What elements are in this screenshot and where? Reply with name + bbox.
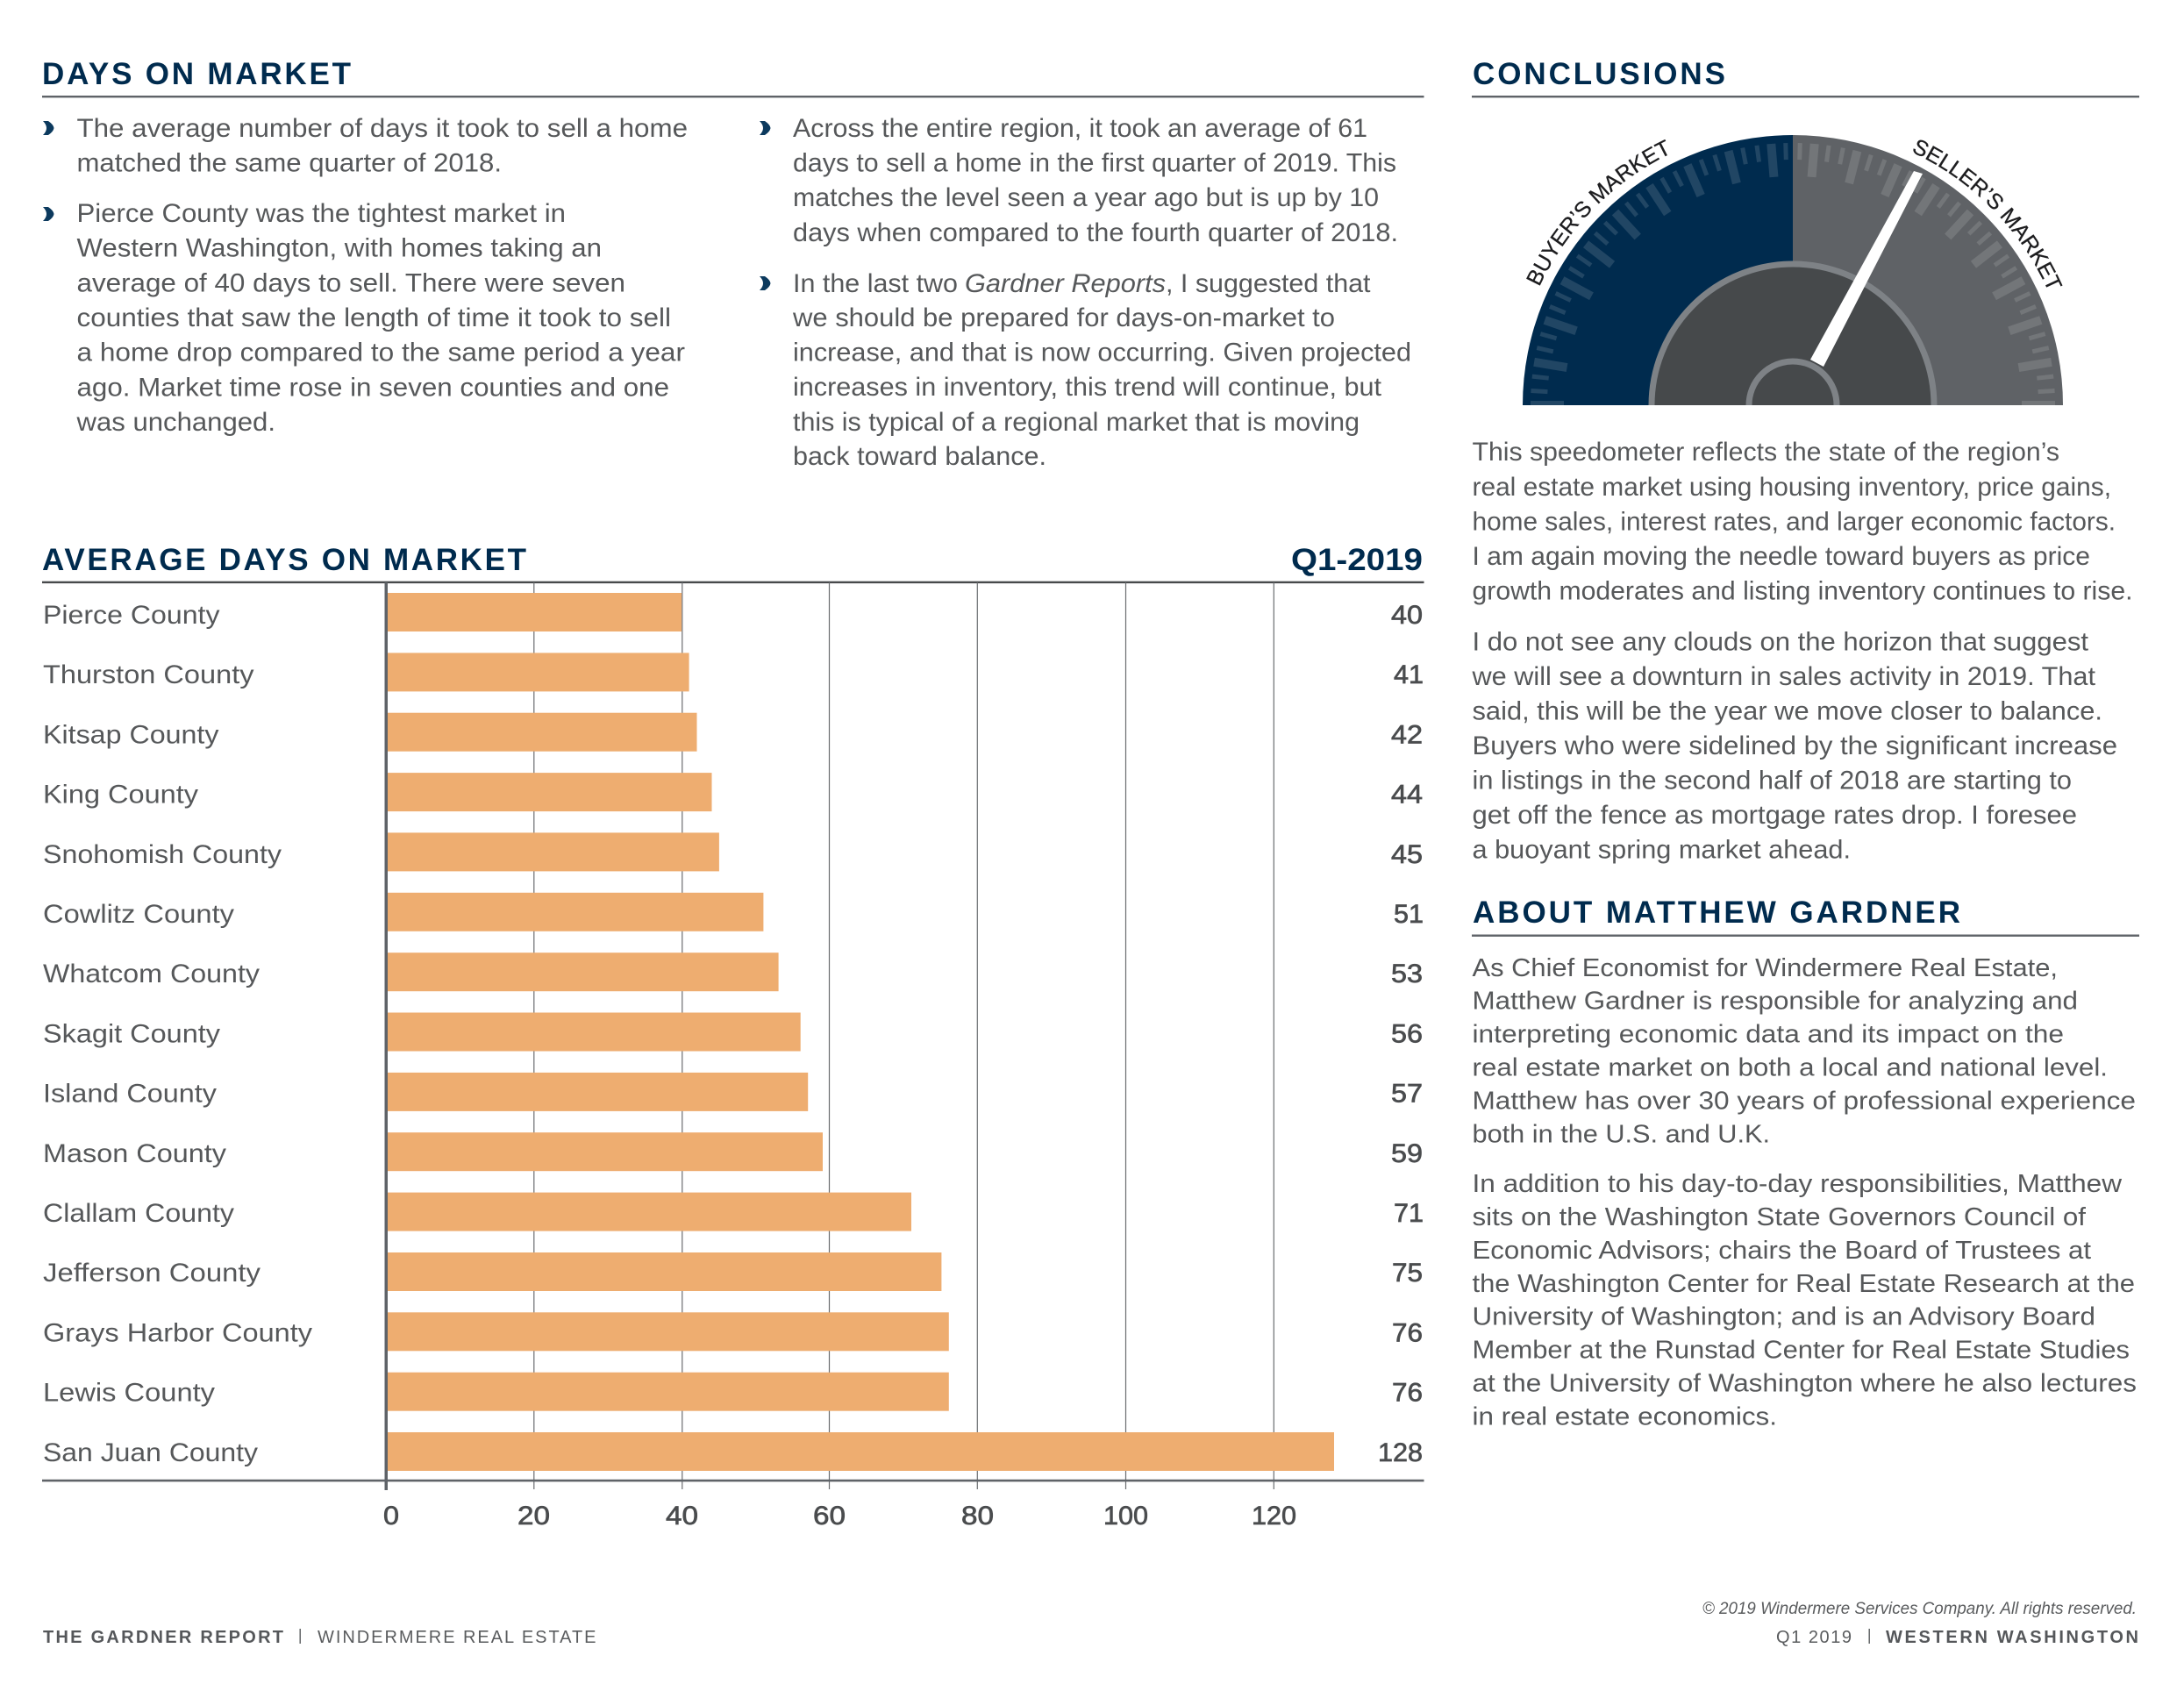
text block: days on market left column: matched the same quarter of 2018.	[77, 149, 502, 177]
county labels: Kitsap County	[43, 720, 219, 749]
text block: conclusions: said, this will be the year we move closer to balance.	[1472, 697, 2102, 726]
county labels: Skagit County	[43, 1019, 220, 1048]
county labels: Mason County	[43, 1139, 226, 1168]
icon: bullet chevron 2	[43, 207, 54, 221]
axis lines	[42, 582, 1424, 1490]
text block: about matthew gardner: Member at the Runstad Center for Real Estate Studies	[1472, 1337, 2130, 1365]
heading: average days on market	[42, 543, 1424, 583]
value labels: 53	[1391, 960, 1423, 988]
text block: days on market left column: ago. Market time rose in seven counties and one	[77, 373, 669, 402]
heading: conclusions: CONCLUSIONS	[1473, 57, 1725, 91]
x axis labels: 120	[1252, 1502, 1296, 1530]
county labels: Whatcom County	[43, 960, 260, 988]
county labels: Lewis County	[43, 1379, 215, 1408]
x axis labels: 20	[517, 1502, 550, 1530]
gauge: buyer half	[1523, 135, 1793, 405]
x axis labels: 80	[961, 1502, 994, 1530]
value labels: 57	[1391, 1080, 1423, 1109]
footer right: WESTERN WASHINGTON	[1886, 1628, 2138, 1647]
text block: conclusions: get off the fence as mortgage rates drop. I foresee	[1472, 801, 2077, 830]
value labels: 76	[1392, 1379, 1423, 1408]
county labels: Clallam County	[43, 1199, 234, 1228]
gauge: seller half	[1793, 135, 2063, 405]
text block: conclusions: growth moderates and listing inventory continues to rise.	[1472, 577, 2133, 605]
value labels: 56	[1391, 1019, 1423, 1048]
county labels: Thurston County	[43, 660, 254, 689]
footer left: THE GARDNER REPORT	[43, 1628, 283, 1647]
footer right: Q1 2019	[1776, 1628, 1852, 1647]
text block: about matthew gardner: sits on the Washington State Governors Council of	[1472, 1203, 2087, 1231]
text block: about matthew gardner: In addition to his day-to-day responsibilities, Matthew	[1472, 1170, 2123, 1198]
text block: about matthew gardner: University of Washington; and is an Advisory Board	[1472, 1303, 2095, 1331]
footer right	[1702, 1600, 2138, 1647]
icon: bullet chevron 1	[43, 121, 54, 135]
heading: average days on market: Q1-2019	[1291, 543, 1423, 577]
text block: about matthew gardner: Matthew Gardner is responsible for analyzing and	[1472, 988, 2078, 1016]
text block: about matthew gardner: the Washington Center for Real Estate Research at the	[1472, 1270, 2135, 1298]
text block: conclusions: This speedometer reflects the state of the region’s	[1472, 438, 2059, 467]
county labels: Jefferson County	[43, 1259, 261, 1288]
text block: conclusions: I do not see any clouds on the horizon that suggest	[1472, 628, 2089, 657]
text block: days on market left column	[43, 114, 688, 437]
text block: about matthew gardner: Economic Advisors; chairs the Board of Trustees at	[1472, 1237, 2091, 1265]
text block: conclusions: home sales, interest rates, and larger economic factors.	[1472, 507, 2116, 537]
x axis labels: 100	[1103, 1502, 1148, 1530]
county labels: King County	[43, 781, 198, 810]
icon: bullet chevron 4	[760, 276, 770, 290]
value labels: 45	[1391, 840, 1423, 869]
text block: about matthew gardner: in real estate economics.	[1472, 1402, 1777, 1431]
x axis labels: 40	[666, 1502, 698, 1530]
text block: days on market right column: , I suggested that	[1166, 269, 1371, 298]
county labels: Cowlitz County	[43, 900, 234, 929]
text block: about matthew gardner: both in the U.S. and U.K.	[1472, 1120, 1770, 1148]
county labels: Snohomish County	[43, 840, 282, 869]
text block: days on market left column: The average number of days it took to sell a home	[77, 114, 688, 143]
footer left: WINDERMERE REAL ESTATE	[318, 1628, 596, 1647]
text block: days on market left column: counties that saw the length of time it took to sell	[77, 303, 671, 332]
value labels	[1378, 601, 1424, 1467]
text block: days on market right column: Across the entire region, it took an average of 61	[793, 114, 1367, 143]
text block: conclusions: real estate market using housing inventory, price gains,	[1472, 473, 2111, 502]
text block: conclusions	[1471, 438, 2133, 865]
text block: days on market right column: increases in inventory, this trend will continue, but	[793, 373, 1382, 402]
text block: days on market right column	[760, 114, 1411, 471]
value labels: 51	[1394, 900, 1424, 929]
text block: conclusions: we will see a downturn in sales activity in 2019. That	[1471, 662, 2096, 691]
x axis labels	[383, 1502, 1296, 1530]
county labels: San Juan County	[43, 1438, 258, 1467]
text block: about matthew gardner: interpreting economic data and its impact on the	[1472, 1021, 2064, 1049]
value labels: 59	[1391, 1139, 1423, 1168]
heading: about matthew gardner: ABOUT MATTHEW GARDNER	[1473, 895, 1960, 930]
icon: bullet chevron 3	[760, 121, 770, 135]
text block: about matthew gardner: Matthew has over 30 years of professional experience	[1472, 1087, 2136, 1115]
county labels: Island County	[43, 1080, 217, 1109]
text block: conclusions: I am again moving the needle toward buyers as price	[1472, 542, 2090, 571]
text block: days on market right column: days when compared to the fourth quarter of 2018.	[793, 218, 1398, 247]
gauge: needle	[1810, 171, 1923, 367]
text block: conclusions: in listings in the second half of 2018 are starting to	[1472, 767, 2072, 795]
text block: conclusions: a buoyant spring market ahead.	[1472, 835, 1851, 865]
footer right: © 2019 Windermere Services Company. All rights reserved.	[1702, 1600, 2137, 1618]
county labels	[43, 601, 312, 1467]
text block: days on market right column: matches the level seen a year ago but is up by 10	[793, 183, 1379, 212]
text block: days on market right column: this is typical of a regional market that is moving	[793, 408, 1360, 437]
text block: about matthew gardner: at the University of Washington where he also lectures	[1472, 1370, 2137, 1398]
value labels: 40	[1391, 601, 1423, 630]
value labels: 44	[1391, 781, 1423, 810]
text block: days on market left column: Pierce County was the tightest market in	[77, 199, 566, 228]
gauge label: seller's market: SELLER’S MARKET	[1913, 140, 2063, 288]
value labels: 42	[1391, 720, 1423, 749]
text block: days on market right column: days to sell a home in the first quarter of 2019. This	[793, 149, 1396, 177]
text block: days on market left column: Western Washington, with homes taking an	[77, 234, 602, 263]
footer left	[43, 1628, 596, 1647]
x axis labels: 0	[383, 1502, 399, 1530]
text block: days on market left column: a home drop compared to the same period a year	[77, 339, 685, 367]
text block: days on market right column: increase, and that is now occurring. Given projected	[793, 339, 1411, 367]
gauge label: buyer's market: BUYER’S MARKET	[1526, 139, 1667, 286]
text block: about matthew gardner: real estate market on both a local and national level.	[1472, 1054, 2108, 1082]
value labels: 76	[1392, 1318, 1423, 1347]
heading: average days on market: AVERAGE DAYS ON MARKET	[42, 543, 526, 577]
bar chart: average days on market by county	[42, 582, 1424, 1530]
value labels: 41	[1394, 660, 1424, 689]
text block: conclusions: Buyers who were sidelined by the significant increase	[1472, 731, 2117, 760]
x axis labels: 60	[813, 1502, 846, 1530]
value labels: 128	[1378, 1438, 1423, 1467]
value labels: 71	[1394, 1199, 1424, 1228]
gauge: hub	[1745, 358, 1840, 405]
speedometer gauge	[1523, 135, 2063, 405]
bars	[388, 593, 1334, 1471]
gauge: inner dial	[1649, 261, 1937, 405]
text block: days on market right column: back toward balance.	[793, 442, 1046, 471]
value labels: 75	[1392, 1259, 1423, 1288]
text block: days on market right column: In the last two	[793, 269, 958, 298]
heading: days on market: DAYS ON MARKET	[42, 57, 351, 91]
text block: days on market right column: we should be prepared for days-on-market to	[792, 303, 1335, 332]
gauge ticks	[1531, 143, 2055, 405]
text block: about matthew gardner: As Chief Economist for Windermere Real Estate,	[1472, 954, 2058, 982]
county labels: Grays Harbor County	[43, 1318, 312, 1347]
text block: days on market left column: was unchanged.	[75, 408, 275, 437]
text block: about matthew gardner	[1472, 954, 2137, 1431]
text block: days on market left column: average of 40 days to sell. There were seven	[77, 268, 625, 297]
county labels: Pierce County	[43, 601, 219, 630]
text block: days on market right column: Gardner Reports	[965, 269, 1166, 298]
